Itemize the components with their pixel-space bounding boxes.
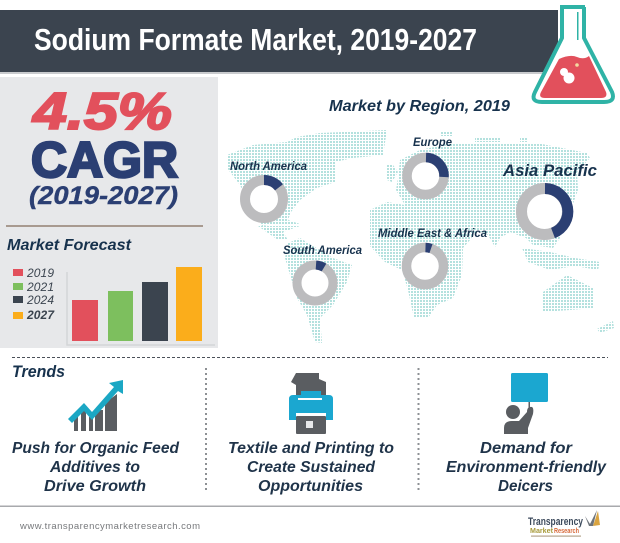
- trend text: Opportunities: [258, 478, 363, 495]
- title banner: [0, 10, 558, 74]
- trend text: Create Sustained: [247, 459, 376, 476]
- icon: person holding sign: [504, 373, 548, 434]
- donut: Asia Pacific: [502, 161, 598, 234]
- legend: 2021: [26, 280, 54, 294]
- CAGR label: CAGR: [31, 132, 178, 188]
- website url: www.transparencymarketresearch.com: [19, 521, 200, 532]
- logo: Research: [554, 528, 579, 535]
- map heading: Market by Region, 2019: [329, 98, 510, 115]
- trend text: Push for Organic Feed: [12, 440, 180, 457]
- donut: Europe: [407, 137, 453, 194]
- donut: Middle East and Africa: [378, 228, 488, 284]
- trend text: [228, 440, 394, 495]
- trend text: Textile and Printing to: [228, 440, 394, 457]
- CAGR value: 4.5%: [32, 83, 172, 141]
- legend: 2024: [26, 293, 54, 307]
- trends section: [12, 358, 608, 495]
- trend text: Environment-friendly: [446, 459, 607, 476]
- panel: CAGR and forecast: [0, 77, 218, 348]
- donut: South America: South America: [283, 245, 363, 257]
- trend 3: [446, 373, 607, 495]
- trend text: Demand for: [480, 440, 573, 457]
- trend 1: [12, 380, 180, 495]
- icon: flask: [534, 7, 613, 102]
- title: Sodium Formate Market, 2019-2027: [34, 22, 477, 57]
- trend text: [12, 440, 180, 495]
- donut: North America: [230, 161, 308, 218]
- donut: Europe: Europe: [413, 137, 453, 149]
- CAGR period: (2019-2027): [29, 182, 178, 210]
- logo: Transparency: [528, 516, 584, 528]
- trend text: Additives to: [49, 459, 140, 476]
- trend text: Drive Growth: [44, 478, 146, 495]
- forecast heading: Market Forecast: [7, 237, 132, 254]
- legend: 2019: [26, 266, 54, 280]
- donut: South America: [283, 245, 363, 301]
- icon: growth chart: [68, 380, 123, 431]
- world map: [227, 130, 614, 343]
- trend text: Deicers: [498, 478, 553, 495]
- donut: Asia Pacific: Asia Pacific: [502, 161, 598, 180]
- legend: 2027: [26, 308, 55, 322]
- footer: [0, 506, 620, 537]
- logo: Market: [530, 528, 554, 535]
- icon: textile printer: [289, 373, 333, 434]
- bar chart: [67, 267, 215, 345]
- trend text: [446, 440, 607, 495]
- donut: North America: North America: [230, 161, 308, 173]
- logo: [528, 510, 600, 537]
- donut: Middle East and Africa: Middle East & Africa: [378, 228, 488, 240]
- trends heading: Trends: [12, 363, 65, 381]
- trend 2: [228, 373, 394, 495]
- legend: [13, 266, 55, 322]
